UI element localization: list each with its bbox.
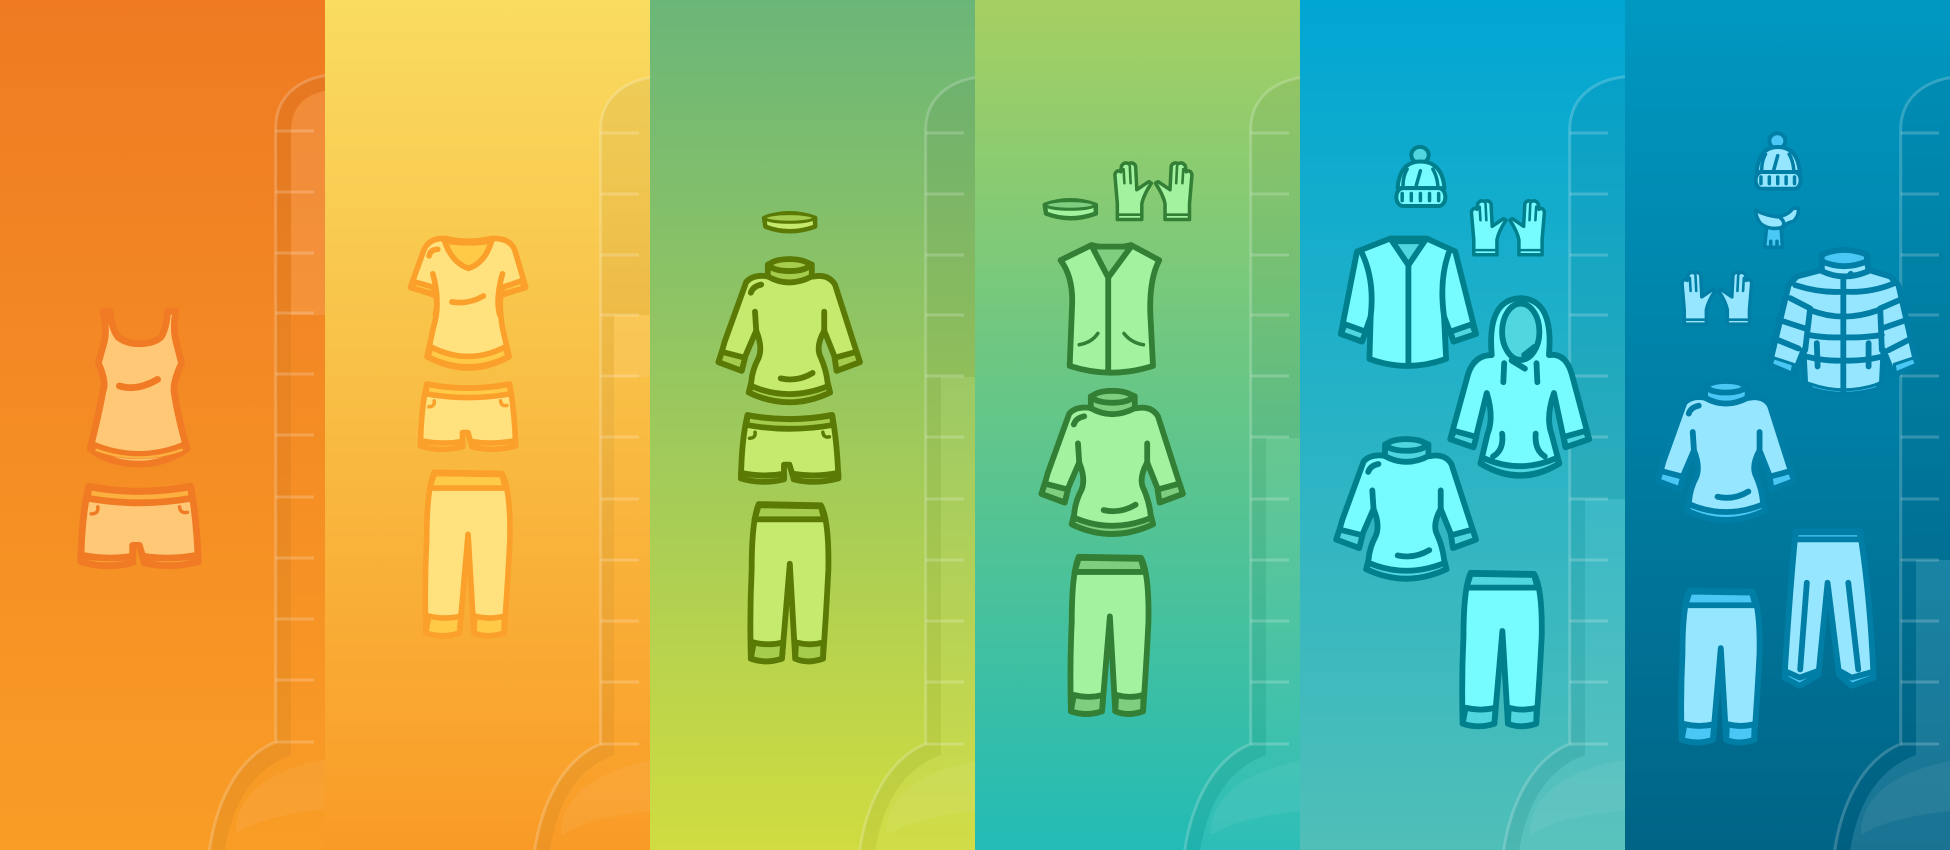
panel: cool, hat, gloves, cardigan, hoodie, sweater and capris	[1300, 0, 1639, 850]
icon: turtleneck sweater	[1041, 391, 1183, 534]
icon: track pants	[1784, 531, 1874, 686]
icon: turtleneck sweater	[1658, 381, 1794, 520]
panel: cold, beanie, scarf, gloves, puffer jacket, sweater and pants	[1625, 0, 1950, 850]
thermometer	[208, 74, 325, 850]
icon: puffer jacket	[1770, 250, 1917, 395]
icon: beanie	[1756, 133, 1801, 189]
icon: t-shirt	[410, 238, 526, 368]
icon: hoodie	[1450, 298, 1589, 476]
icon: turtleneck sweater	[719, 259, 860, 402]
thermometer	[858, 76, 975, 850]
panel: warm, headband, sweater, shorts and capris	[650, 0, 995, 850]
icon: shorts	[81, 486, 198, 566]
panel: hot, t-shirt, shorts and capris	[325, 0, 670, 850]
icon: vest	[1061, 245, 1159, 373]
thermometer	[1183, 76, 1300, 850]
thermometer	[1832, 76, 1950, 850]
icon: tank top	[89, 311, 189, 464]
icon: gloves	[1115, 163, 1192, 220]
icon: shorts	[420, 384, 516, 449]
icon: cardigan	[1341, 239, 1476, 366]
icon: shorts	[741, 415, 838, 482]
icon: scarf	[1755, 208, 1798, 247]
icon: capri leggings	[1070, 557, 1149, 714]
icon: capri leggings	[1462, 573, 1542, 726]
icon: turtleneck sweater	[1336, 439, 1476, 579]
thermometer	[1502, 75, 1625, 850]
icon: beanie	[1396, 147, 1445, 206]
icon: headband	[1045, 200, 1096, 218]
icon: capri leggings	[750, 504, 828, 661]
thermometer	[533, 76, 650, 850]
icon: headband	[764, 213, 815, 231]
icon: gloves	[1471, 201, 1544, 255]
panel: hottest, tank top and shorts	[0, 0, 345, 850]
icon: gloves	[1682, 272, 1752, 324]
panel: mild, headband, gloves, vest, sweater and capris	[975, 0, 1320, 850]
icon: leggings	[1681, 591, 1760, 742]
icon: capri leggings	[425, 472, 510, 636]
